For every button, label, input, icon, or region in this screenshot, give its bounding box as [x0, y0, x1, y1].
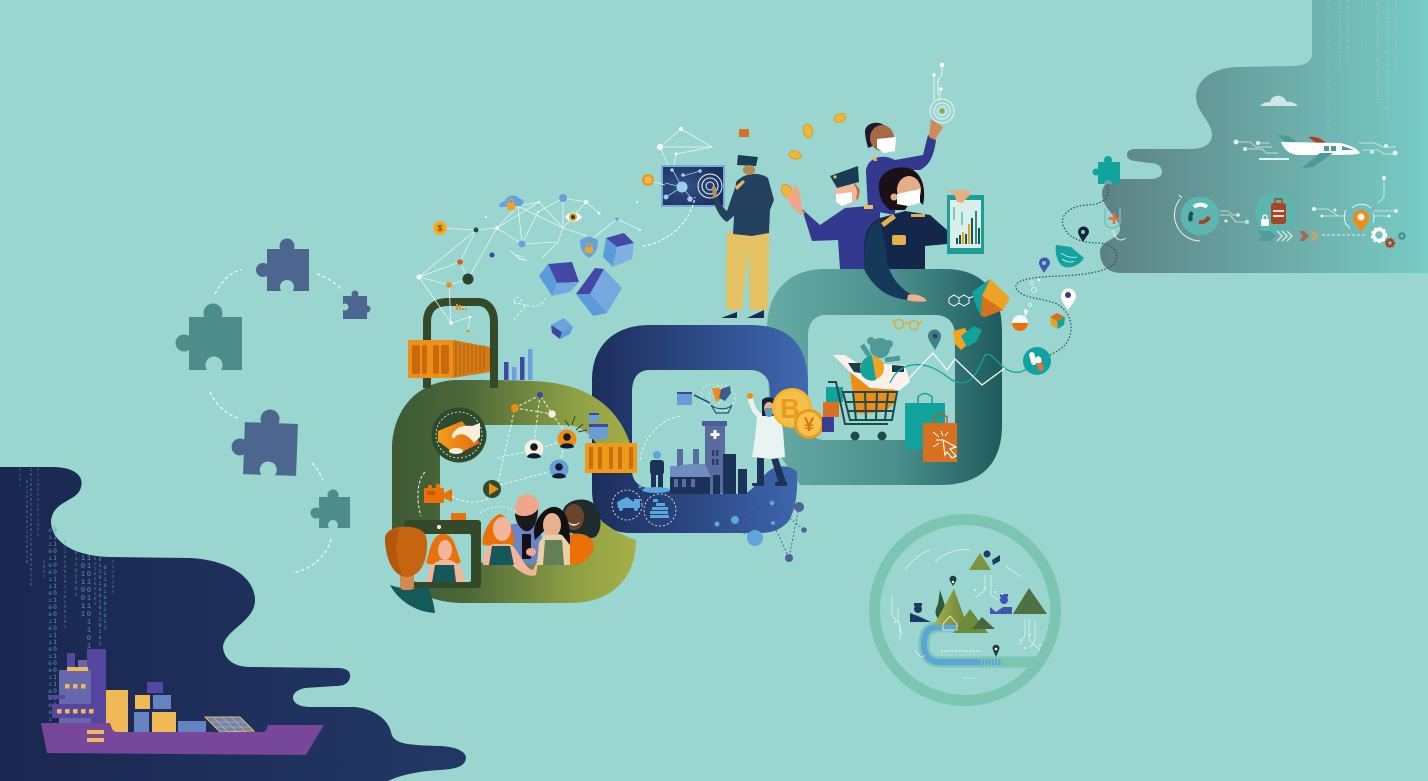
- colored cube: [972, 279, 1010, 317]
- road: [924, 627, 1040, 662]
- puzzle piece large teal: [176, 304, 242, 374]
- chevrons arrow: [1258, 231, 1366, 241]
- binary data rain, right: 10100110100101101: [1384, 0, 1390, 119]
- binary data rain, left: 011010011010010110100110100: [52, 527, 58, 716]
- green ring: [392, 380, 636, 603]
- small bars on arch: [456, 304, 467, 310]
- binary data rain, left: 011010010110100101: [62, 539, 68, 630]
- binary data rain, right: 01101001011010: [1338, 0, 1342, 70]
- binary data rain, right: 011010010110100: [1394, 0, 1398, 75]
- pill icon: [1023, 347, 1051, 375]
- officer with coin: [787, 166, 880, 269]
- binary data rain, left: 10110011: [79, 555, 87, 619]
- flying coins: [779, 112, 847, 200]
- cubes: [539, 233, 634, 339]
- binary data rain, left: 1001: [42, 559, 46, 580]
- dashed arc in blue ring: [640, 416, 680, 460]
- binary data rain, right: 011010010110101: [1374, 0, 1382, 105]
- binary data rain, right: 0110100101101: [1346, 0, 1350, 65]
- flask icon: [1012, 309, 1028, 331]
- handshake badge: [432, 408, 486, 462]
- orange small box: [739, 129, 749, 137]
- coins: bitcoin and yen: ¥: [804, 415, 815, 436]
- truck and bricks icons: [612, 490, 676, 526]
- play button: [483, 480, 501, 498]
- airplane: [1234, 135, 1398, 168]
- pins: [993, 645, 1000, 657]
- jigsaw pieces and dashes: [176, 238, 370, 573]
- circuit above raised hand: [930, 63, 954, 123]
- binary data rain, left: 0110100110100101101001101001: [46, 527, 54, 723]
- white map pin: [1061, 288, 1076, 310]
- icon: shield lock: [580, 236, 598, 258]
- binary data rain, left: 0101: [18, 467, 22, 488]
- landscape badge: [874, 520, 1056, 700]
- shopping cart: [828, 382, 897, 440]
- video camera: [418, 472, 490, 516]
- map pin: [928, 330, 941, 350]
- cloud: [1260, 96, 1298, 106]
- dashed curve from cubes: [513, 297, 545, 320]
- dark map pin: [1078, 227, 1089, 242]
- dotted route: [1016, 182, 1117, 355]
- dashed arc over woman: [480, 507, 516, 513]
- group of friends: [482, 494, 601, 576]
- hospital factory: [670, 421, 747, 494]
- officers: [910, 603, 931, 622]
- doctor: [747, 393, 787, 486]
- top-right teal wave: [1100, 0, 1428, 273]
- orange container on arch: [408, 340, 490, 378]
- tablet with video call: [404, 513, 481, 588]
- binary data rain, left: 0110100101: [92, 556, 98, 607]
- person seen from behind: [385, 527, 435, 613]
- construction worker: [638, 451, 670, 493]
- small cube on route: [1050, 313, 1065, 329]
- binary data rain, left: 1101011011011: [85, 555, 93, 659]
- masked woman with tablet: [864, 167, 984, 302]
- orange container on ring junction: [585, 443, 637, 473]
- binary data rain, left: 01101001011: [102, 565, 108, 631]
- binary data rain, left: 01101001: [73, 550, 79, 598]
- masked man reaching up: [865, 119, 943, 215]
- bar chart: [504, 349, 532, 380]
- bottom-left navy wave: [0, 467, 466, 781]
- glasses: [892, 320, 922, 330]
- puzzle piece blue middle: [230, 408, 298, 479]
- stethoscope icon: [1105, 208, 1128, 240]
- puzzle piece small blue: [342, 290, 370, 319]
- network dots under blue ring: [714, 501, 807, 562]
- location pin with signal: [1312, 176, 1398, 232]
- binary data rain, left: 101001011010011010010110: [28, 467, 34, 588]
- officer standing at screen: [661, 155, 774, 318]
- binary data rain, left: 01101001011010010: [24, 479, 30, 565]
- puzzle piece small teal: [310, 490, 350, 530]
- suitcase and lock icon: [1255, 192, 1297, 234]
- face mask icon: [1056, 245, 1084, 267]
- binary data rain, right: [1326, 0, 1398, 140]
- binary data rain, left: 011010010110101: [97, 557, 103, 647]
- stacked boxes by cart: [822, 387, 843, 432]
- blue ring: [592, 325, 808, 533]
- puzzle piece blue top: [256, 238, 309, 294]
- dashed arc to screen: [643, 197, 695, 246]
- network constellation: [416, 194, 641, 332]
- blue map pin: [1039, 258, 1050, 273]
- binary data rain, left: 0110100: [110, 559, 116, 595]
- small bubbles: [1028, 279, 1040, 306]
- icon: dollar coin: $: [438, 224, 443, 233]
- molecule: [949, 295, 978, 306]
- coins: bitcoin and yen: B: [780, 393, 800, 424]
- cargo ship: [41, 649, 324, 755]
- blue boxes: [589, 413, 608, 439]
- teal ring: [767, 269, 1002, 485]
- icon: eye: [565, 212, 582, 222]
- gears: [1372, 228, 1406, 248]
- binary data rain, left: [18, 467, 116, 723]
- icon: cloud lock: [499, 196, 524, 210]
- open parcel with toys: [833, 337, 910, 414]
- binary data rain, right: 01101001011010: [1360, 0, 1364, 70]
- mountains: [936, 590, 946, 625]
- circuit trees: [892, 550, 1040, 657]
- arch handle on green ring: [427, 302, 494, 388]
- binary data rain, right: 0110100101101001011010010110: [1326, 0, 1330, 140]
- medical supplies: [677, 384, 735, 413]
- connected people network: [497, 392, 587, 485]
- zigzag trend lines: [890, 353, 1035, 390]
- coins: bitcoin and yen: [772, 388, 824, 439]
- icon: dollar coin: [433, 221, 447, 235]
- recycle icon: [1174, 195, 1249, 241]
- network above screen: [642, 127, 712, 186]
- gloves: [953, 326, 982, 350]
- shopping bags: [905, 394, 957, 462]
- binary data rain, left: 01101001011001: [36, 467, 40, 538]
- puzzle piece teal on route: [1092, 156, 1120, 184]
